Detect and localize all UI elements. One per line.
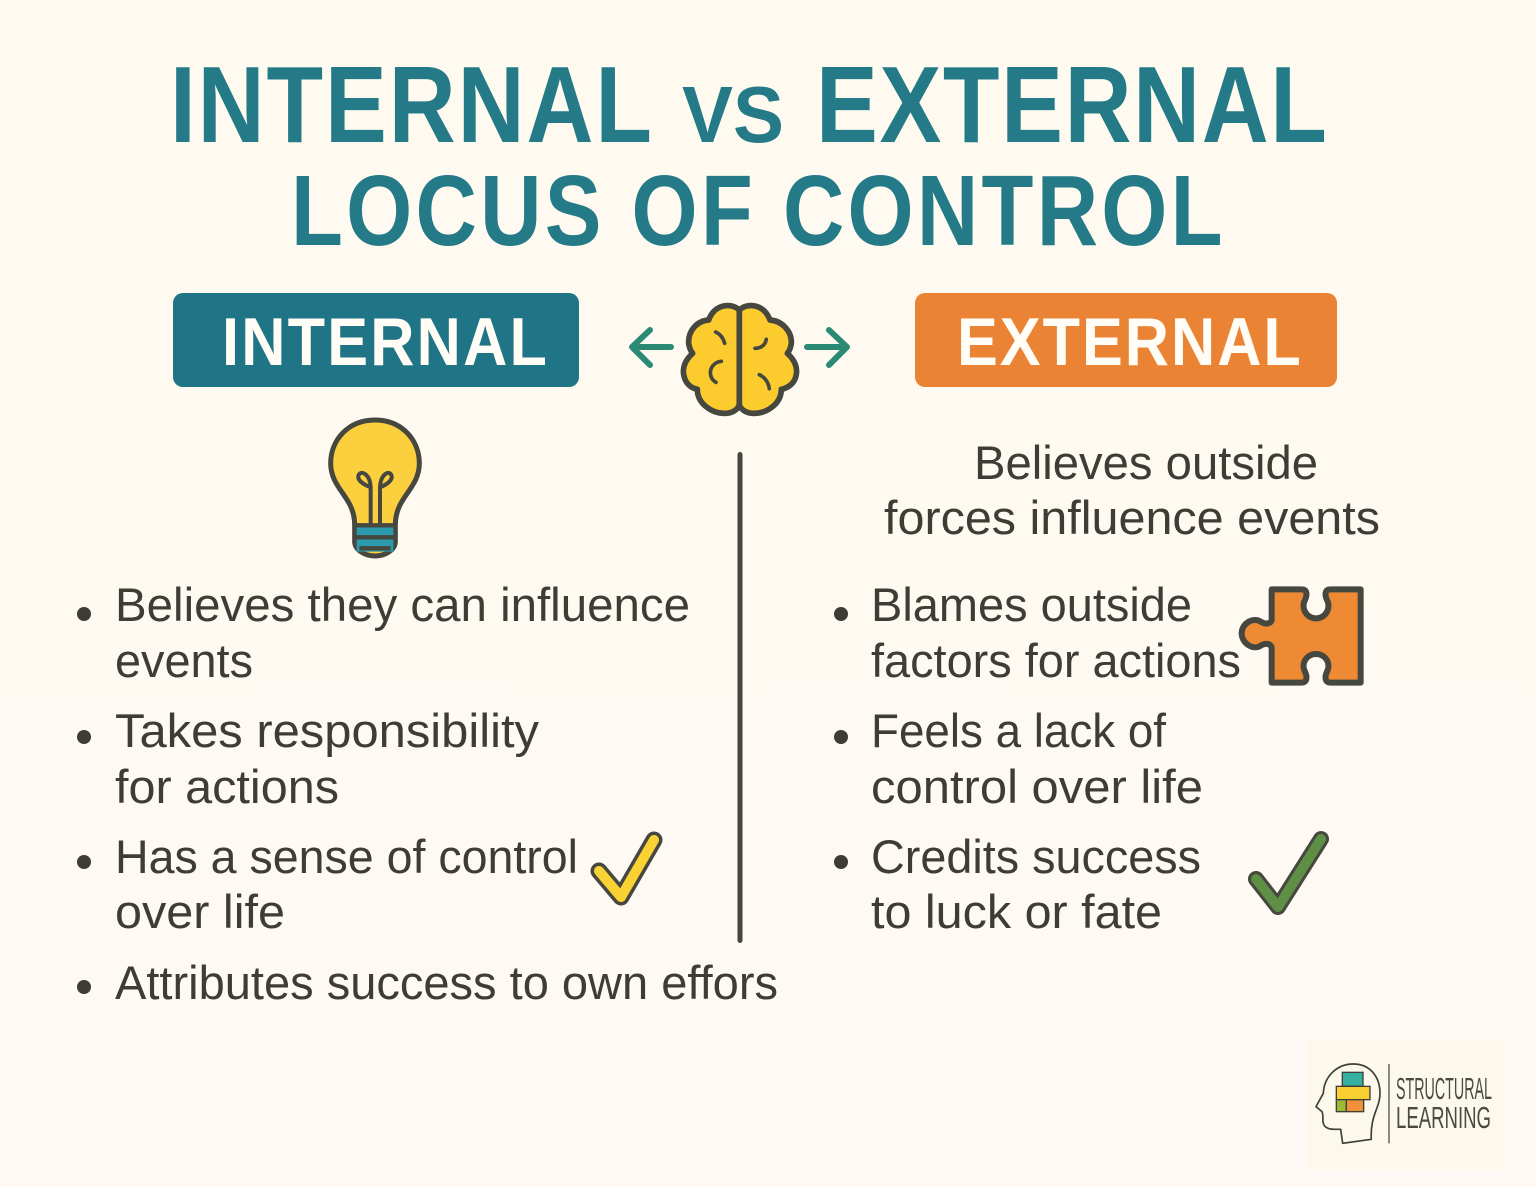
text block: external traits: to luck or fate [871,885,1162,938]
text block: internal traits: Takes responsibility [115,704,540,757]
icon: left arrow [632,330,671,365]
text block: internal traits: over life [115,885,285,938]
text block: internal traits: Believes they can influence [115,578,690,631]
text block: external traits: factors for actions [871,634,1241,687]
title: VS [682,70,784,159]
panel: external heading: EXTERNAL [957,303,1301,380]
text block: external description [884,436,1380,544]
title: INTERNAL [170,44,652,166]
panel: external heading [915,293,1337,387]
icon: right arrow [807,330,847,365]
panel: internal heading: INTERNAL [222,303,547,380]
text block: external traits: Blames outside [871,578,1192,631]
icon: brain [683,306,797,413]
text block: internal traits: events [115,634,253,687]
icon: yellow check [599,840,654,897]
text block: internal traits: for actions [115,760,339,813]
text block: external description: Believes outside [974,436,1318,489]
text block: internal traits: Has a sense of control [115,830,578,883]
text block: external description: forces influence events [884,491,1380,544]
logo head icon [1316,1064,1390,1143]
panel: internal heading [173,293,579,387]
title: LOCUS OF CONTROL [291,154,1223,267]
icon: light bulb [331,420,419,556]
title [170,44,1327,267]
text block: external traits: control over life [871,760,1203,813]
title: EXTERNAL [816,44,1327,166]
icon: green check [1256,839,1321,907]
text block: external traits: Feels a lack of [871,704,1167,757]
text block: internal traits: Attributes success to own effors [115,956,778,1009]
icon: puzzle piece [1242,589,1361,683]
divider line [738,452,742,943]
logo: structural learning [1307,1040,1505,1170]
text block: external traits: Credits success [871,830,1201,883]
text block: internal traits [77,578,778,1009]
text block: external traits [834,578,1241,938]
